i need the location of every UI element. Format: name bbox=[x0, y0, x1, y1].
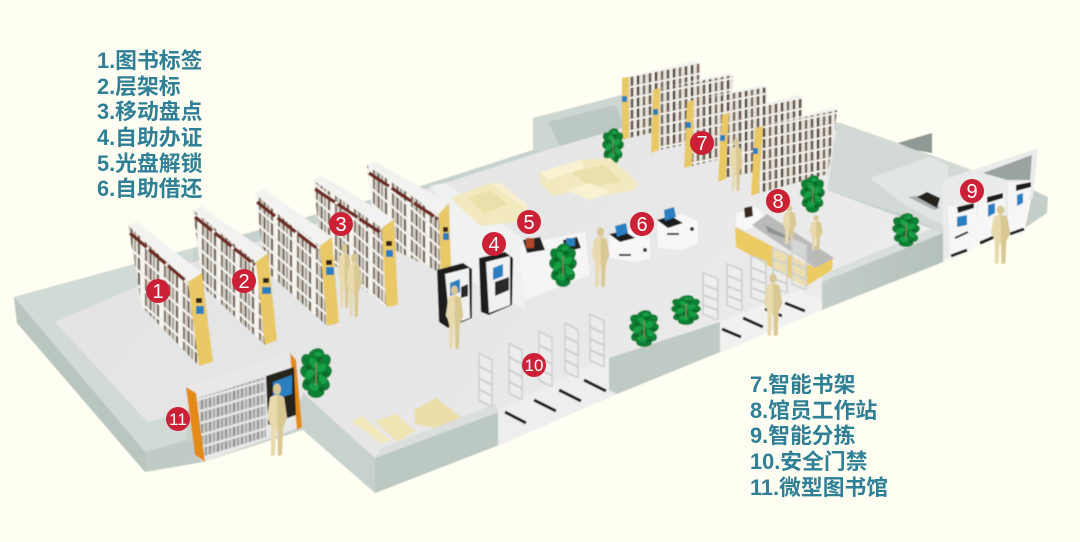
badge 1: 1 bbox=[152, 281, 164, 303]
back shelf 1 bbox=[622, 61, 700, 140]
plants on partition bbox=[628, 294, 702, 347]
back shelf 3 bbox=[684, 85, 767, 168]
sorting machine 1 bbox=[948, 203, 977, 261]
badge 10 bbox=[522, 353, 546, 377]
badge 5: 5 bbox=[523, 212, 535, 234]
library shelf 5 bbox=[367, 162, 451, 273]
back shelf 4 bbox=[718, 95, 803, 182]
badge 6 bbox=[630, 212, 654, 236]
librarians bbox=[782, 205, 823, 250]
sorting room (item 9) bbox=[943, 148, 1048, 262]
badge 2: 2 bbox=[238, 271, 250, 293]
badge 9: 9 bbox=[966, 181, 978, 203]
self-checkout station B (item 6) bbox=[657, 207, 698, 250]
legend list right: 10.安全门禁 bbox=[750, 449, 868, 474]
badge 2 bbox=[232, 269, 256, 293]
badge 8 bbox=[766, 189, 790, 213]
badge 8: 8 bbox=[772, 191, 784, 213]
panel window bbox=[983, 155, 1032, 180]
lower wall faces bbox=[303, 393, 375, 493]
plant by micro library bbox=[299, 346, 333, 398]
library shelf 1 bbox=[128, 222, 213, 366]
legend list left: 3.移动盘点 bbox=[97, 99, 203, 124]
person at desk bbox=[592, 227, 609, 287]
right rear wall band bbox=[827, 123, 972, 232]
self-service card kiosk front bbox=[437, 263, 472, 328]
badge 10: 10 bbox=[525, 356, 543, 375]
badge 9 bbox=[960, 179, 984, 203]
plant behind sofa bbox=[601, 126, 625, 164]
back shelf 5 bbox=[751, 108, 837, 196]
translucent panel bbox=[943, 148, 1038, 262]
plant by right wall bbox=[891, 211, 921, 247]
number badges bbox=[146, 131, 984, 431]
legend list right bbox=[750, 372, 888, 500]
main floor bbox=[55, 128, 935, 458]
legend list left: 5.光盘解锁 bbox=[97, 151, 203, 176]
large sofa bbox=[540, 158, 637, 200]
legend list left bbox=[97, 48, 203, 201]
pads bbox=[722, 303, 805, 337]
self-service card kiosk (item 4) back bbox=[479, 252, 513, 315]
badge 1 bbox=[146, 279, 170, 303]
white service wall bbox=[430, 183, 525, 310]
badge 4 bbox=[482, 232, 506, 256]
plant by shelf bbox=[799, 173, 826, 213]
badge 4: 4 bbox=[488, 234, 500, 256]
small sofas bbox=[351, 398, 461, 444]
person browsing smart shelf bbox=[729, 138, 743, 191]
security gates front group (item 10) bbox=[479, 314, 606, 423]
plant by desk bbox=[548, 241, 578, 287]
sorting machine 2 bbox=[973, 192, 1005, 245]
back shelf 2 bbox=[651, 73, 733, 153]
outer wall mass bbox=[14, 95, 943, 493]
self-checkout station A (item 6) bbox=[609, 223, 650, 262]
legend list right: 8.馆员工作站 bbox=[750, 398, 877, 423]
library shelf 3 bbox=[255, 189, 339, 326]
legend list left: 2.层架标 bbox=[97, 74, 181, 99]
legend list right: 9.智能分拣 bbox=[750, 423, 856, 448]
badge 3 bbox=[329, 212, 353, 236]
badge 11 bbox=[166, 407, 190, 431]
DVD unlock desk (item 5) bbox=[518, 232, 590, 300]
library scene bbox=[14, 61, 1048, 493]
person at micro library bbox=[267, 384, 287, 456]
security gates rear group (item 10) bbox=[703, 239, 806, 337]
pads bbox=[505, 380, 606, 423]
badge 5 bbox=[517, 210, 541, 234]
legend list right: 11.微型图书馆 bbox=[750, 475, 888, 500]
floor plan base bbox=[14, 95, 972, 493]
gate area floor bbox=[498, 356, 617, 446]
legend list left: 6.自助借还 bbox=[97, 176, 203, 201]
sorting machine 3 bbox=[1008, 181, 1032, 236]
sorting conveyor bbox=[908, 192, 940, 210]
badge 7: 7 bbox=[696, 133, 708, 155]
micro library cabinet (item 11) bbox=[186, 353, 302, 462]
person at gate bbox=[764, 273, 782, 336]
library shelf 4 bbox=[313, 176, 398, 307]
back wing wall bbox=[533, 95, 640, 152]
legend list left: 4.自助办证 bbox=[97, 125, 203, 150]
right end wall bbox=[1025, 190, 1048, 228]
badge 6: 6 bbox=[636, 214, 648, 236]
right wall face bbox=[822, 233, 943, 310]
left sofa bbox=[451, 183, 527, 226]
people at shelf 3 bbox=[337, 243, 362, 317]
badge 3: 3 bbox=[335, 214, 347, 236]
left wall rim bbox=[14, 248, 193, 452]
person at kiosk bbox=[446, 285, 463, 349]
librarian workstation (item 8) bbox=[735, 206, 834, 287]
legend list right: 7.智能书架 bbox=[750, 372, 856, 397]
badge 7 bbox=[690, 131, 714, 155]
library shelf 2 bbox=[193, 206, 277, 345]
badge 11: 11 bbox=[169, 410, 187, 429]
legend list left: 1.图书标签 bbox=[97, 48, 203, 73]
right gate floor bbox=[720, 290, 822, 353]
smart shelf row (item 7) bbox=[622, 61, 837, 196]
person at sorting machines bbox=[991, 205, 1010, 264]
partition wall bbox=[609, 322, 720, 394]
